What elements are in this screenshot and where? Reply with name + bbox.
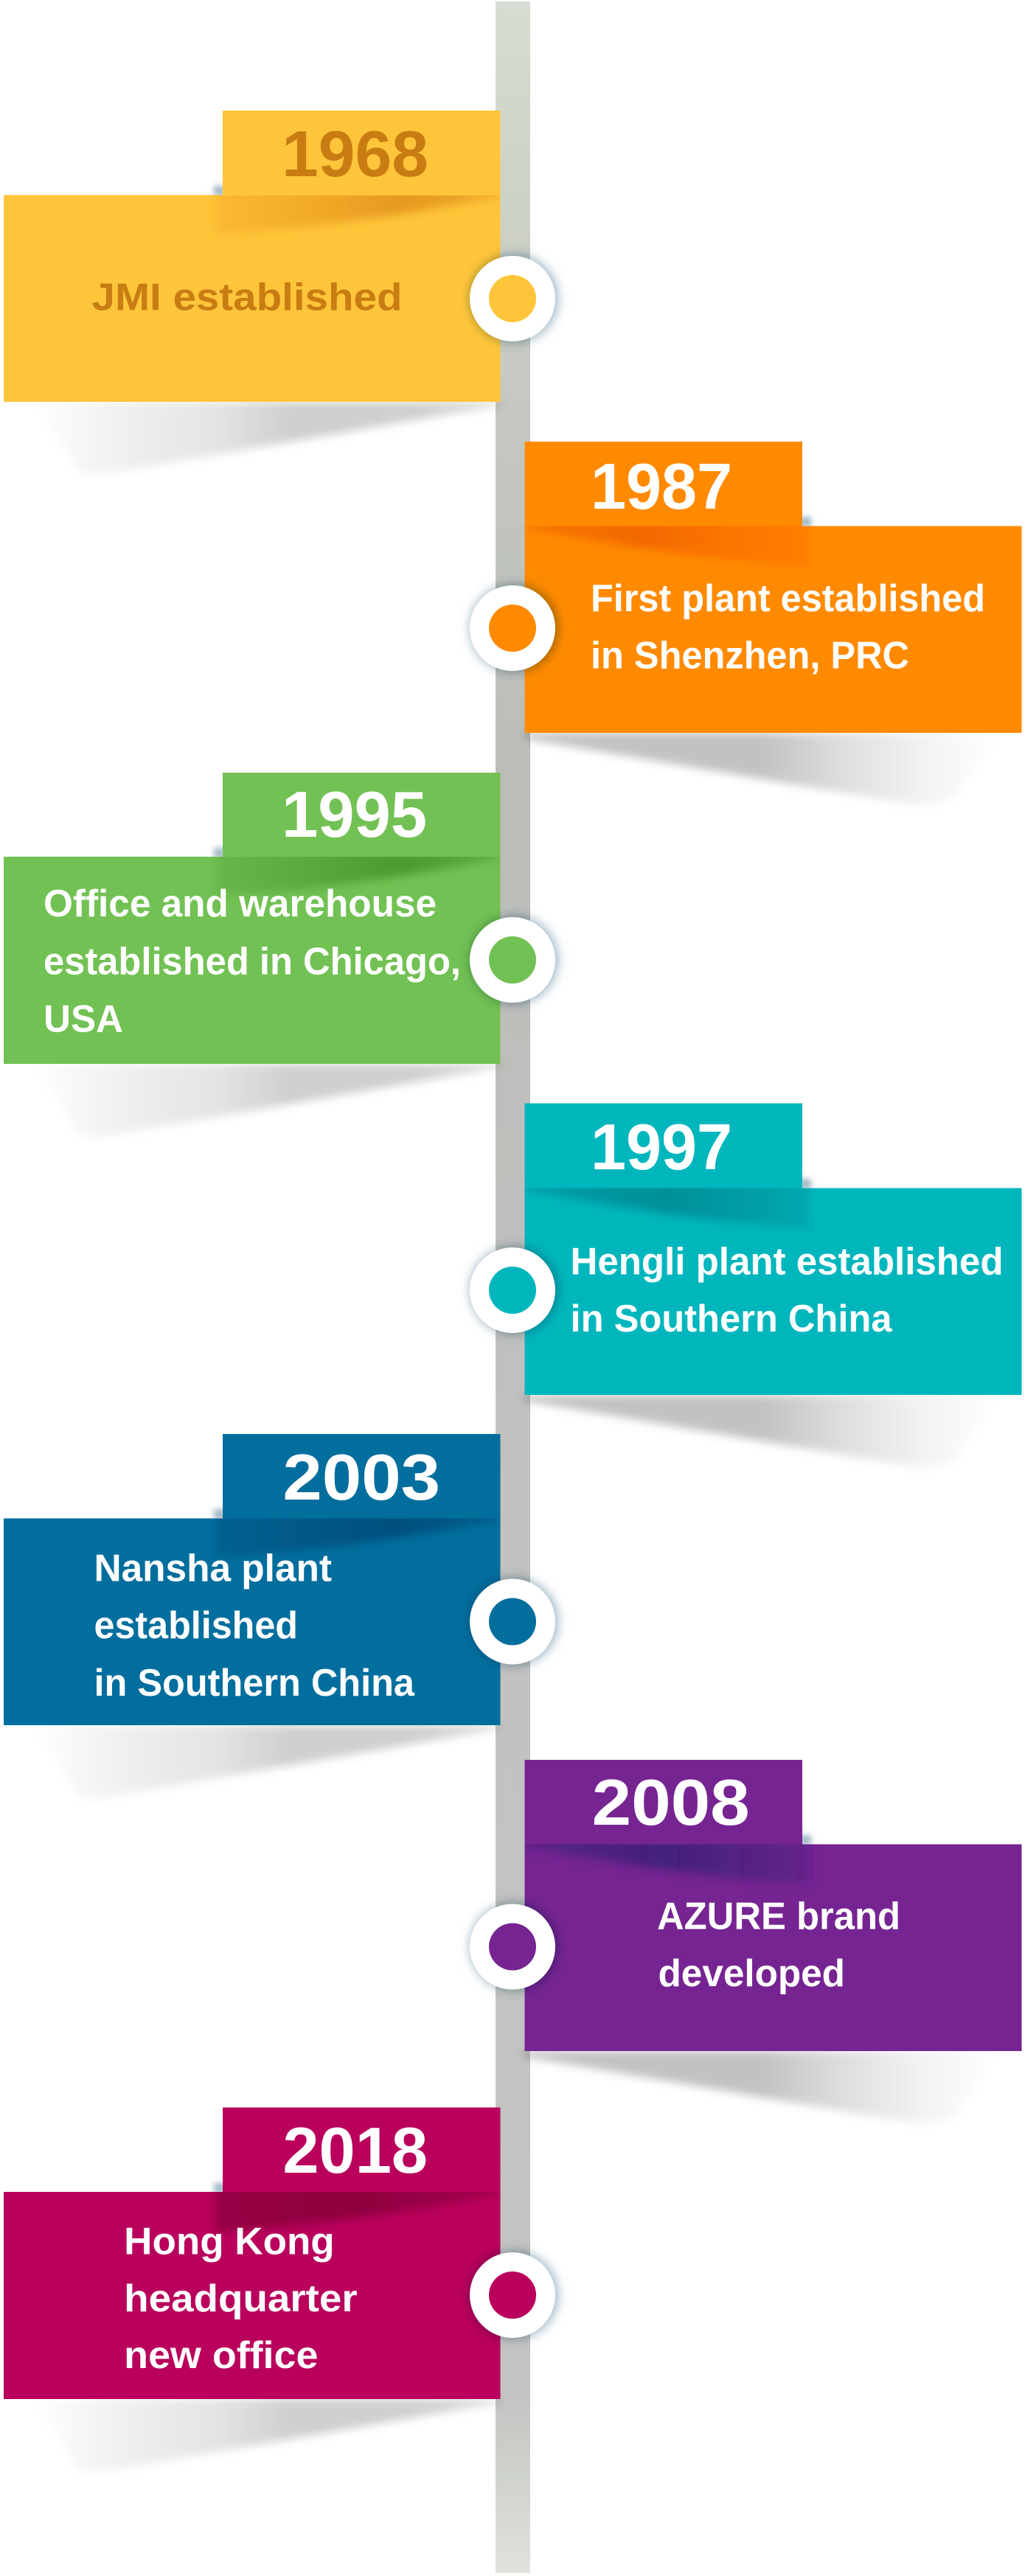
description: new office [124, 2334, 318, 2377]
tab corner shadow [799, 1179, 811, 1189]
tab fold shadow [525, 526, 807, 565]
timeline marker [470, 1246, 558, 1334]
panel: 1987 milestone [470, 442, 1022, 804]
tab fold shadow [525, 1188, 808, 1228]
panel: 2018 milestone [4, 2107, 558, 2472]
description [44, 883, 461, 1041]
card drop shadow [523, 1395, 1001, 1466]
timeline marker [470, 1902, 558, 1991]
description [571, 1240, 1003, 1340]
card body [525, 526, 1022, 733]
year label: 1997 [591, 1110, 732, 1183]
tab corner shadow [799, 1835, 811, 1845]
tab corner shadow [214, 1509, 226, 1520]
description: Hong Kong [124, 2221, 335, 2263]
panel: 2003 milestone [4, 1434, 558, 1798]
description [657, 1895, 900, 1995]
description [591, 577, 985, 677]
year label: 1987 [591, 450, 732, 523]
panel: 2008 milestone [470, 1760, 1022, 2123]
card body [4, 1519, 500, 1725]
description: in Southern China [94, 1662, 415, 1705]
panel: 1997 milestone [470, 1103, 1022, 1466]
card body [4, 2192, 500, 2399]
card drop shadow [32, 1725, 503, 1798]
year label: 2008 [592, 1766, 750, 1839]
description: JMI established [91, 276, 403, 318]
tab fold shadow [215, 2186, 501, 2232]
description: USA [44, 998, 123, 1041]
description: First plant established [591, 577, 985, 620]
timeline vertical bar [496, 1, 530, 2573]
timeline marker [470, 254, 558, 343]
timeline marker [470, 916, 558, 1004]
card drop shadow [523, 2051, 1001, 2123]
description: Hengli plant established [571, 1240, 1003, 1283]
year tab [525, 442, 802, 526]
card body [525, 1188, 1022, 1395]
tab corner shadow [214, 186, 226, 196]
year label: 1995 [282, 778, 427, 851]
card drop shadow [32, 1064, 503, 1137]
description: established [94, 1604, 298, 1647]
year tab [223, 111, 500, 195]
year tab [223, 773, 500, 857]
description: in Shenzhen, PRC [591, 634, 909, 677]
year tab [525, 1103, 802, 1188]
card body [4, 195, 500, 402]
year label: 2003 [282, 1441, 440, 1514]
description: established in Chicago, [44, 941, 461, 984]
year label: 1968 [282, 117, 428, 190]
card body [525, 1845, 1022, 2051]
year tab [223, 2107, 500, 2193]
description: AZURE brand [657, 1895, 900, 1938]
tab corner shadow [214, 2183, 226, 2193]
tab fold shadow [217, 195, 500, 233]
timeline marker [470, 2251, 558, 2339]
year tab [223, 1434, 500, 1519]
timeline marker [470, 1578, 558, 1666]
timeline marker [470, 584, 558, 672]
description [94, 1547, 415, 1705]
panel: 1995 milestone [4, 773, 558, 1137]
year label: 2018 [282, 2114, 428, 2187]
card drop shadow [523, 733, 1001, 804]
card body [4, 857, 500, 1064]
panel: 1968 milestone [4, 111, 558, 475]
tab fold shadow [216, 1519, 498, 1557]
card drop shadow [32, 2399, 503, 2472]
tab fold shadow [218, 857, 500, 895]
description: developed [658, 1952, 845, 1995]
description [124, 2221, 358, 2377]
description: in Southern China [571, 1298, 893, 1340]
year tab [525, 1760, 802, 1845]
description: headquarter [124, 2277, 358, 2320]
description: Office and warehouse [44, 883, 437, 925]
description: Nansha plant [94, 1547, 332, 1590]
tab corner shadow [214, 848, 226, 858]
tab corner shadow [799, 517, 811, 527]
card drop shadow [32, 402, 503, 475]
tab fold shadow [525, 1845, 810, 1885]
